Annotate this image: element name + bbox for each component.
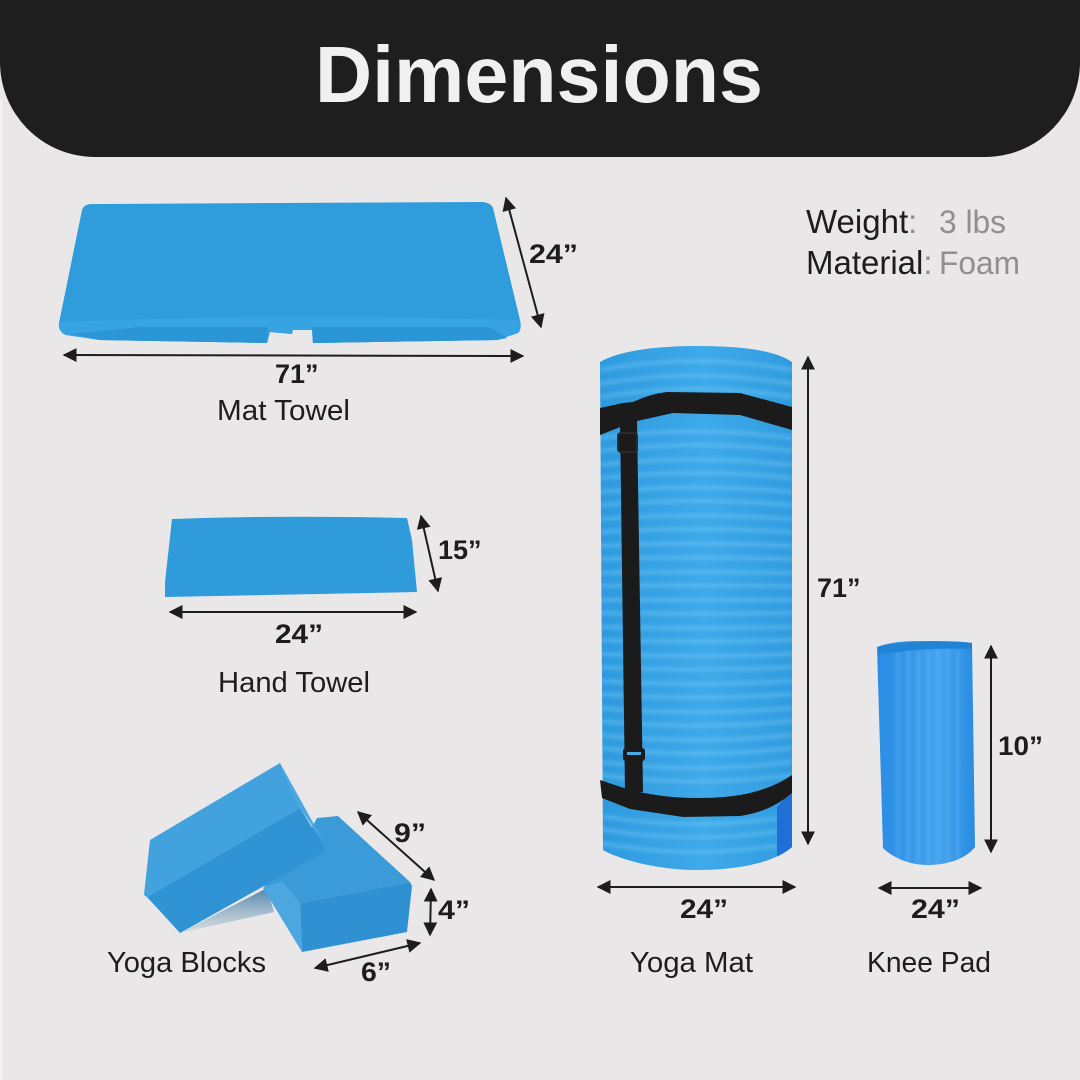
arrow: block height [430, 889, 431, 935]
icon: knee pad [877, 641, 975, 865]
strap: bottom band [600, 775, 792, 817]
label: 24: 24” [680, 894, 728, 924]
label: 15: 15” [438, 535, 482, 565]
icon: mat towel [59, 202, 521, 343]
label: hand towel: Hand Towel [218, 667, 370, 699]
label: 6: 6” [361, 957, 391, 987]
panel: yoga mat [598, 346, 861, 979]
panel: hand towel [165, 516, 482, 699]
icon: hand towel [165, 517, 417, 597]
label: yoga blocks: Yoga Blocks [107, 947, 266, 979]
label: 24: 24” [275, 619, 323, 649]
arrow: mat height [807, 357, 809, 844]
strap: vertical [620, 420, 643, 792]
icon: rear block [263, 816, 412, 952]
panel: mat towel [59, 198, 578, 427]
label: knee pad: Knee Pad [867, 947, 991, 979]
label: 24: 24” [529, 239, 578, 269]
icon: rolled yoga mat [600, 346, 792, 870]
panel: yoga blocks [107, 763, 470, 987]
arrow: towel depth [506, 198, 541, 327]
strap: top band [600, 392, 792, 435]
arrow: towel width [64, 355, 523, 356]
arrow: hand towel width [170, 611, 416, 613]
text block: specs: Weight: [806, 203, 917, 240]
label: yoga mat: Yoga Mat [630, 947, 753, 979]
text block: specs: Foam [939, 245, 1020, 281]
label: 71: 71” [817, 573, 861, 603]
text block: specs [806, 203, 1020, 281]
title: Dimensions [315, 30, 763, 119]
label: 24: 24” [911, 894, 960, 924]
panel: knee pad [867, 641, 1043, 979]
label: 10: 10” [998, 731, 1043, 761]
arrow: knee pad height [990, 646, 992, 852]
arrow: hand towel depth [421, 516, 438, 591]
text block: specs: 3 lbs [939, 204, 1006, 240]
arrow: block width [315, 943, 420, 968]
icon: bottom buckle [623, 748, 645, 761]
text block: specs: Material: [806, 244, 933, 281]
icon: block shadow [180, 888, 274, 933]
label: 4: 4” [438, 895, 470, 925]
header banner [0, 0, 1080, 157]
arrow: block length [358, 812, 434, 880]
icon: top buckle [618, 433, 637, 452]
label: 9: 9” [394, 818, 426, 848]
label: mat towel: Mat Towel [217, 395, 350, 427]
icon: front block [144, 763, 326, 933]
label: 71: 71” [275, 359, 319, 389]
arrow: mat width [598, 886, 795, 888]
arrow: knee pad width [879, 887, 981, 889]
